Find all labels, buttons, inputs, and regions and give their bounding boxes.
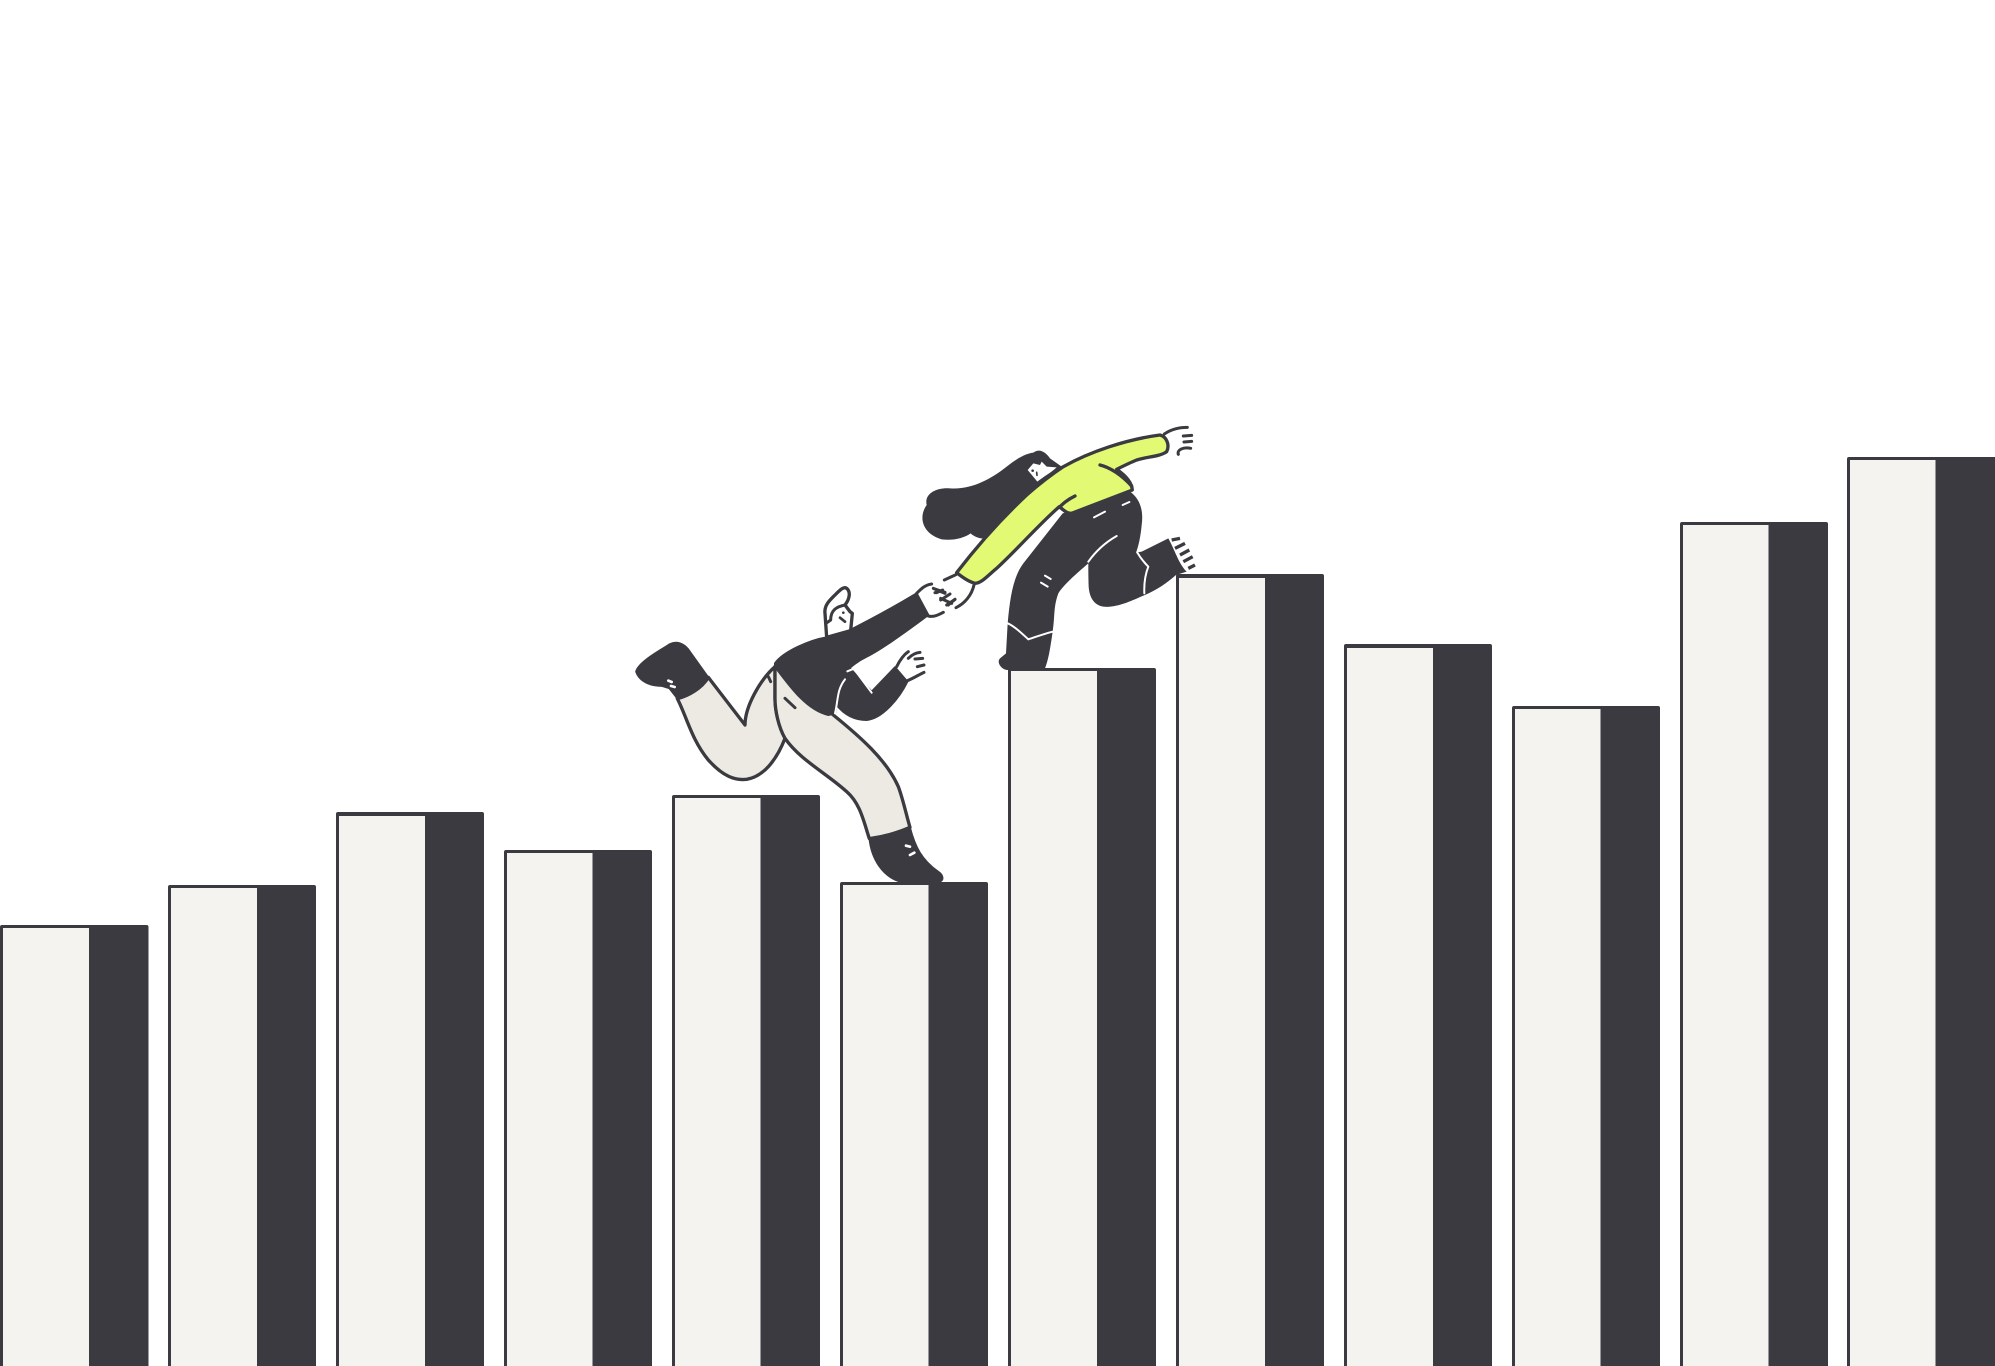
bar 1 <box>0 925 148 1366</box>
lower arm <box>837 667 907 720</box>
bar 12 <box>1847 457 1995 1366</box>
bar 7 <box>1008 668 1156 1366</box>
front shoe <box>869 827 943 882</box>
sweater <box>957 435 1168 583</box>
icon: man raised hand <box>917 584 955 616</box>
back shoe <box>636 643 708 699</box>
bar 2 <box>168 885 316 1366</box>
hair <box>922 451 1062 540</box>
bar 10 <box>1512 706 1660 1366</box>
trouser detail lines <box>1008 502 1148 639</box>
front leg <box>775 667 910 839</box>
bar 11 <box>1680 522 1828 1366</box>
icon: woman lower hand <box>935 575 974 608</box>
torso and raised arm <box>775 593 928 715</box>
bar 9 <box>1344 644 1492 1366</box>
trouser folds <box>768 677 795 708</box>
bar 8 <box>1176 574 1324 1366</box>
figure: man in dark sweater climbing <box>636 584 955 882</box>
bar 3 <box>336 812 484 1366</box>
bar chart: ascending striped columns <box>0 457 1995 1366</box>
bar 4 <box>504 850 652 1366</box>
face <box>1028 462 1057 482</box>
icon: man lower hand <box>897 652 924 681</box>
icon: woman raised hand <box>1164 427 1192 454</box>
back leg <box>677 667 785 780</box>
icon: man head <box>825 588 852 637</box>
sweater fold lines <box>1059 465 1132 507</box>
bar 6 <box>840 882 988 1366</box>
figure: woman in lime sweater climbing <box>922 427 1196 670</box>
trousers <box>999 492 1187 670</box>
bar 5 <box>672 795 820 1366</box>
sweater fold lines <box>835 668 855 713</box>
back shoe <box>1168 538 1196 572</box>
